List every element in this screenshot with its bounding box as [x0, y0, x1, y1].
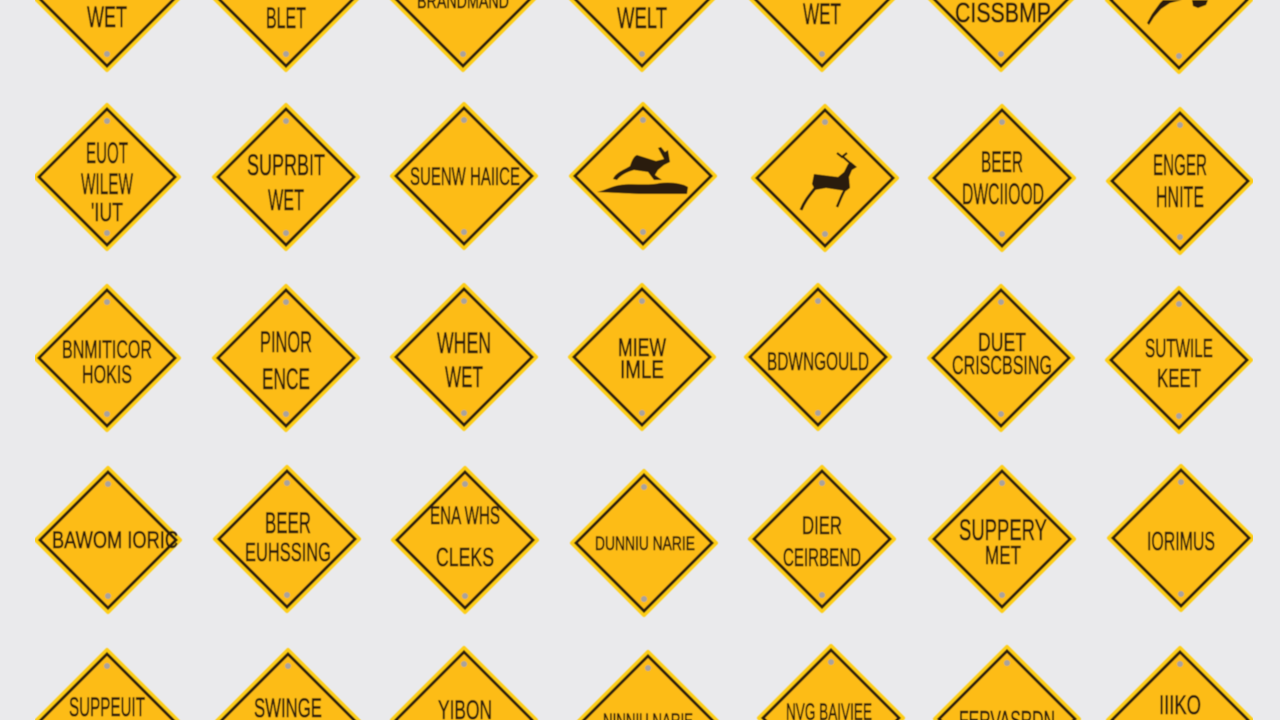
sign: DUET CRISCBSING, row 3 column 6 — [929, 286, 1073, 430]
sign: BNMITICOR HOKIS, row 3 column 1: BNMITICOR — [62, 336, 152, 364]
sign: BLET, row 1 column 2 — [214, 0, 358, 70]
sign: CISSBMP, row 1 column 6 — [929, 0, 1073, 70]
sign: BLET, row 1 column 2: BLET — [266, 2, 306, 35]
sign: WHEN WET, row 3 column 3: WHEN — [437, 327, 491, 360]
sign: IIIKO, row 5 column 7 — [1108, 648, 1252, 720]
sign: BAWOM IORIC, row 4 column 1 — [36, 468, 180, 612]
sign: SUPRBIT WET, row 2 column 2: WET — [268, 184, 304, 217]
sign: WHEN WET, row 3 column 3 — [392, 285, 536, 429]
sign: SUTWILE KEET, row 3 column 7: KEET — [1157, 363, 1201, 393]
sign: WET, row 1 column 5 — [750, 0, 894, 70]
sign: SUTWILE KEET, row 3 column 7: SUTWILE — [1145, 333, 1213, 363]
sign: BRANDMAND, row 1 column 3 — [391, 0, 535, 70]
sign: EUOT WILEW IUT, row 2 column 1 — [35, 105, 179, 249]
sign: MIEW IMLE, row 3 column 4 — [570, 285, 714, 429]
sign: BDWNGOULD, row 3 column 5 — [746, 285, 890, 429]
sign: SWINGE, row 5 column 2 — [216, 650, 360, 720]
sign: ENA WHS CLEKS, row 4 column 3: ENA WHS — [430, 502, 500, 530]
sign: SUPPERY MET, row 4 column 6: SUPPERY — [959, 514, 1047, 547]
sign: ENA WHS CLEKS, row 4 column 3 — [393, 468, 537, 612]
sign: BEER DWCIIOOD, row 2 column 6 — [930, 106, 1074, 250]
sign: partly cropped text, row 5 column 4 — [576, 652, 720, 720]
sign: SUENW HAIICE, row 2 column 3: SUENW HAIICE — [410, 163, 520, 191]
sign: ENGER HNITE, row 2 column 7 — [1108, 109, 1252, 253]
sign: ENA WHS CLEKS, row 4 column 3: CLEKS — [436, 542, 494, 572]
icon: deer — [801, 153, 857, 210]
sign: BAWOM IORIC, row 4 column 1: BAWOM IORIC — [52, 527, 178, 554]
sign: DUNNIU NARIE, row 4 column 4 — [572, 471, 716, 615]
sign: BNMITICOR HOKIS, row 3 column 1 — [35, 286, 179, 430]
icon: deer and hill — [597, 147, 688, 194]
icon: deer legs — [1147, 0, 1208, 25]
sign: EUOT WILEW IUT, row 2 column 1: EUOT — [86, 137, 128, 170]
sign: PINOR ENCE, row 3 column 2: ENCE — [262, 363, 310, 396]
sign: MIEW IMLE, row 3 column 4: MIEW — [618, 334, 666, 362]
sign: SUENW HAIICE, row 2 column 3 — [392, 104, 536, 248]
sign: DUNNIU NARIE, row 4 column 4: DUNNIU NARIE — [595, 534, 695, 555]
sign: FERVASRDN, row 5 column 6 — [935, 647, 1079, 720]
sign: SUTWILE KEET, row 3 column 7 — [1107, 288, 1251, 432]
sign: IIIKO, row 5 column 7: IIIKO — [1159, 690, 1201, 720]
sign: ENGER HNITE, row 2 column 7: ENGER — [1153, 149, 1207, 182]
sign: SUPPEUIT, row 5 column 1 — [35, 650, 179, 720]
sign: BEER EUHSSING, row 4 column 2: EUHSSING — [245, 537, 331, 567]
sign: WELT, row 1 column 4: WELT — [617, 2, 667, 35]
sign: SUPPERY MET, row 4 column 6 — [930, 467, 1074, 611]
sign: leaping deer, row 2 column 5 — [753, 106, 897, 250]
sign: BEER DWCIIOOD, row 2 column 6: BEER — [981, 146, 1023, 179]
sign: SUPRBIT WET, row 2 column 2: SUPRBIT — [247, 149, 325, 182]
sign: BEER EUHSSING, row 4 column 2 — [215, 467, 359, 611]
sign: YIBON, row 5 column 3 — [392, 648, 536, 720]
sign: MIEW IMLE, row 3 column 4: IMLE — [620, 356, 664, 384]
sign: WET, row 1 column 1 — [35, 0, 179, 70]
sign: DUET CRISCBSING, row 3 column 6: DUET — [978, 327, 1026, 357]
sign: ENGER HNITE, row 2 column 7: HNITE — [1156, 181, 1204, 214]
sign: DUET CRISCBSING, row 3 column 6: CRISCBSING — [952, 350, 1052, 380]
sign: EUOT WILEW IUT, row 2 column 1: WILEW — [81, 168, 133, 201]
sign: BEER DWCIIOOD, row 2 column 6: DWCIIOOD — [962, 178, 1044, 211]
sign: EUOT WILEW IUT, row 2 column 1: 'IUT — [91, 197, 123, 227]
sign: PINOR ENCE, row 3 column 2 — [214, 286, 358, 430]
sign: WELT, row 1 column 4 — [570, 0, 714, 70]
sign: BEER EUHSSING, row 4 column 2: BEER — [265, 507, 311, 540]
sign: deer leaping over hill, row 2 column 4 — [571, 104, 715, 248]
sign: leaping deer, row 1 column 7 — [1107, 0, 1251, 72]
sign: SUPPERY MET, row 4 column 6: MET — [985, 540, 1021, 570]
sign: SUPRBIT WET, row 2 column 2 — [214, 105, 358, 249]
sign: WHEN WET, row 3 column 3: WET — [445, 361, 483, 394]
sign: IORIMUS, row 4 column 7: IORIMUS — [1147, 526, 1215, 556]
sign: DIER CEIRBEND, row 4 column 5: DIER — [802, 512, 842, 540]
sign: WET, row 1 column 1: WET — [87, 1, 127, 34]
sign: NVG BAIVIEE, row 5 column 5 — [759, 646, 903, 720]
sign: BDWNGOULD, row 3 column 5: BDWNGOULD — [767, 348, 869, 376]
sign: DIER CEIRBEND, row 4 column 5: CEIRBEND — [783, 544, 861, 572]
sign: BNMITICOR HOKIS, row 3 column 1: HOKIS — [82, 361, 132, 389]
sign: DIER CEIRBEND, row 4 column 5 — [750, 467, 894, 611]
sign: IORIMUS, row 4 column 7 — [1109, 466, 1253, 610]
sign: PINOR ENCE, row 3 column 2: PINOR — [260, 326, 312, 359]
